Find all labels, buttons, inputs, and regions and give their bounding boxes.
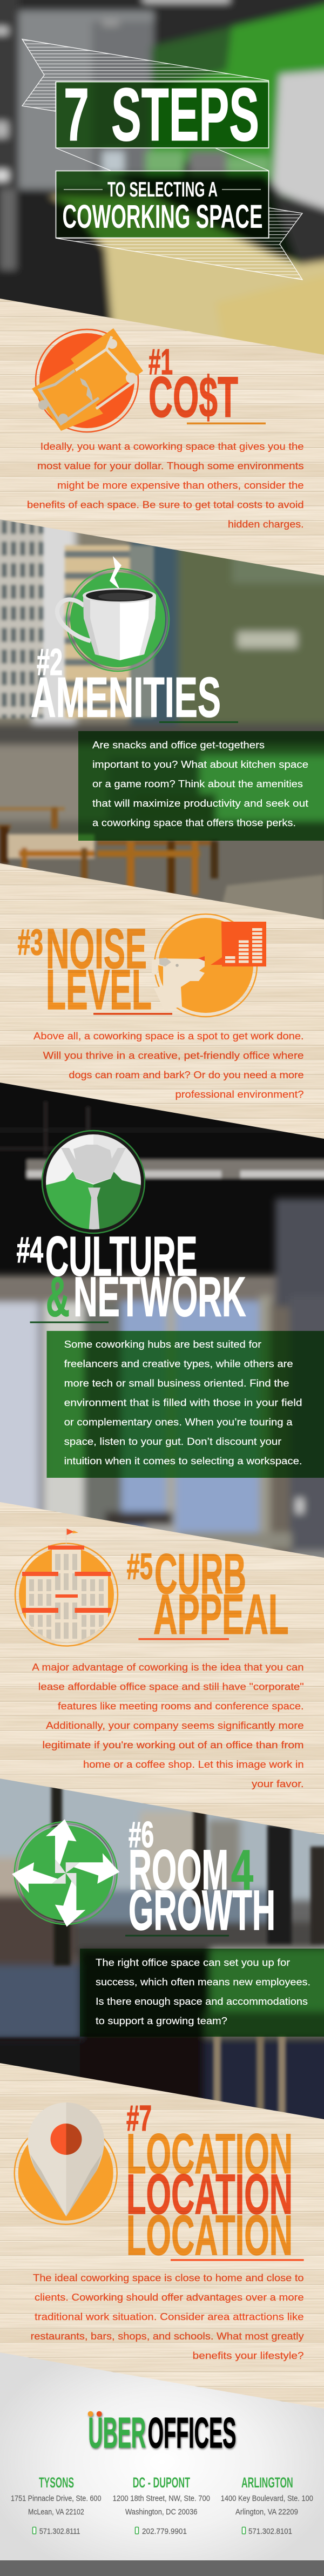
body text: to support a growing team? <box>96 2015 227 2026</box>
body text: space, listen to your gut. Don’t discount your <box>64 1436 281 1447</box>
growth photo background <box>0 1771 324 2130</box>
body text: dogs can roam and bark? Or do you need a more <box>69 1069 304 1080</box>
body text <box>33 1030 304 1100</box>
icon: phone <box>242 2527 245 2534</box>
section 1: cost <box>27 328 304 530</box>
underline <box>159 721 238 723</box>
body text: most value for your dollar. Though some environments <box>37 460 304 471</box>
body text <box>64 1338 302 1466</box>
wood panel: #3 noise level <box>0 863 324 1139</box>
icon: map pin in circle <box>15 2102 117 2225</box>
panel: culture text background <box>46 1331 324 1478</box>
underline <box>30 1322 109 1323</box>
body text: hidden charges. <box>228 518 304 530</box>
body text: benefits of each space. Be sure to get total costs to avoid <box>27 499 304 510</box>
body text <box>92 739 308 828</box>
banner fold: connecting lines <box>56 148 269 171</box>
footer: Tysons location: 571.302.8111 <box>39 2527 80 2536</box>
subtitle rules <box>64 189 261 190</box>
footer: logo: UBER <box>88 2409 146 2457</box>
culture photo background <box>0 1080 324 1567</box>
footer: Tysons location <box>11 2474 102 2536</box>
body text: lease affordable office space and still have "corporate" <box>38 1681 304 1692</box>
section 5: curb appeal <box>15 1529 304 1789</box>
body text <box>32 1661 304 1789</box>
section 4: culture and network <box>17 1131 302 1466</box>
icon: four pinwheel arrows in circle <box>12 1819 119 1927</box>
body text: Will you thrive in a creative, pet-friendly office where <box>43 1050 304 1061</box>
footer: DC Dupont location: 202.779.9901 <box>142 2527 187 2536</box>
icon: office building in circle <box>15 1529 118 1646</box>
underline <box>171 2259 304 2261</box>
heading: #7: #7 <box>126 2098 152 2139</box>
body text: Above all, a coworking space is a spot to get work done. <box>33 1030 304 1042</box>
body text: features like meeting rooms and conference space. <box>58 1700 304 1712</box>
body text: benefits your lifestyle? <box>193 2350 304 2361</box>
body text: your favor. <box>252 1778 304 1789</box>
body text: A major advantage of coworking is the idea that you can <box>32 1661 304 1673</box>
underline <box>187 422 266 424</box>
heading: #3: #3 <box>17 922 43 963</box>
heading: cost: CO$T <box>148 364 238 429</box>
body text: or a game room? Think about the amenities <box>92 778 303 789</box>
footer: Tysons location: TYSONS <box>39 2474 74 2491</box>
footer: DC Dupont location: 1200 18th Street, NW, Ste. 700 <box>113 2494 210 2503</box>
icon: shirt, collar and tie in circle <box>42 1131 145 1233</box>
title box outline top <box>56 82 269 148</box>
body text: important to you? What about kitchen space <box>92 759 308 770</box>
heading: #2: #2 <box>37 641 63 683</box>
underline <box>93 1013 172 1015</box>
title: 7: 7 <box>64 73 89 157</box>
body text: intuition when it comes to selecting a workspace. <box>64 1455 302 1466</box>
heading: noise: NOISE <box>46 917 147 981</box>
heading: #1: #1 <box>148 342 173 382</box>
icon: coffee cup in circle <box>57 556 169 671</box>
footer: DC Dupont location: Washington, DC 20036 <box>125 2508 198 2517</box>
subtitle box outline <box>56 171 269 238</box>
panel: amenities text background <box>78 731 324 841</box>
underline <box>125 1935 229 1936</box>
body text <box>27 441 304 530</box>
icon: barking dog with sound bars <box>152 914 266 1017</box>
logo: dot orange <box>88 2411 93 2417</box>
heading: room: ROOM <box>129 1838 228 1902</box>
footer: Arlington location: 1400 Key Boulevard, Ste. 100 <box>221 2494 313 2503</box>
icon: phone <box>135 2527 138 2534</box>
subtitle: to selecting a: TO SELECTING A <box>107 178 218 201</box>
body text: clients. Coworking should offer advantages over a more <box>35 2291 304 2303</box>
wood panel: #1 cost <box>0 299 324 576</box>
subtitle box <box>56 171 269 238</box>
body text: might be more expensive than others, consider the <box>57 479 304 491</box>
body text: a coworking space that offers those perks. <box>92 817 296 828</box>
header photo background <box>0 0 324 367</box>
body text: Are snacks and office get-togethers <box>92 739 265 751</box>
heading: curb: CURB <box>154 1543 246 1606</box>
logo: dot red <box>97 2411 102 2417</box>
body text: freelancers and creative types, while others are <box>64 1358 293 1369</box>
body text: Some coworking hubs are best suited for <box>64 1338 261 1350</box>
body text: environment that is filled with those in your field <box>64 1397 302 1408</box>
body text <box>31 2272 304 2361</box>
body text: more tech or small business oriented. Find the <box>64 1377 289 1389</box>
heading: level: LEVEL <box>46 958 152 1022</box>
heading: culture: CULTURE <box>45 1226 198 1288</box>
amenities photo background <box>0 508 324 939</box>
heading: #6: #6 <box>129 1814 154 1855</box>
footer: Tysons location: 1751 Pinnacle Drive, Ste. 600 <box>11 2494 102 2503</box>
footer: Arlington location <box>221 2474 313 2536</box>
footer background <box>0 2343 324 2576</box>
body text: The ideal coworking space is close to home and close to <box>33 2272 304 2283</box>
ribbon: upper <box>22 39 269 111</box>
heading: #5: #5 <box>127 1546 153 1587</box>
title box: 7 steps <box>56 82 269 148</box>
panel: growth text background <box>80 1949 324 2037</box>
body text: professional environment? <box>175 1088 303 1100</box>
underline <box>138 1638 229 1640</box>
section 2: amenities <box>31 556 308 828</box>
heading: 4: 4 <box>231 1838 253 1902</box>
body text: Ideally, you want a coworking space that gives you the <box>40 441 304 452</box>
body text: Additionally, your company seems significantly more <box>46 1720 304 1731</box>
body text: restaurants, bars, shops, and schools. What most greatly <box>31 2330 304 2342</box>
heading: #4: #4 <box>17 1229 43 1270</box>
section 3: noise level <box>17 914 304 1100</box>
ribbon: lower <box>56 208 302 280</box>
footer: Tysons location: McLean, VA 22102 <box>28 2508 84 2517</box>
section 6: room 4 growth <box>12 1814 310 2026</box>
icon: torn money in circle <box>32 328 143 432</box>
body text: success, which often means new employees. <box>96 1976 310 1987</box>
body text: that will maximize productivity and seek out <box>92 797 308 809</box>
footer: Arlington location: Arlington, VA 22209 <box>235 2508 298 2517</box>
heading: ampersand: & <box>46 1266 70 1328</box>
wood panel: #7 location <box>0 2063 324 2409</box>
body text <box>96 1957 310 2026</box>
sound bars <box>225 928 262 963</box>
footer: DC Dupont location: DC - DUPONT <box>133 2474 190 2491</box>
section 7: location <box>15 2098 304 2361</box>
body text: Is there enough space and accommodations <box>96 1996 308 2007</box>
body text: The right office space can set you up for <box>96 1957 290 1968</box>
wood panel: #5 curb appeal <box>0 1502 324 1835</box>
body text: legitimate if you're working out of an office than from <box>42 1739 303 1750</box>
footer: DC Dupont location <box>113 2474 210 2536</box>
body text: traditional work situation. Consider area attractions like <box>35 2311 304 2322</box>
icon: phone <box>32 2527 36 2534</box>
title banner <box>22 39 302 280</box>
footer: Arlington location: 571.302.8101 <box>248 2527 292 2536</box>
body text: or complementary ones. When you’re touring a <box>64 1416 293 1428</box>
body text: home or a coffee shop. Let this image work in <box>83 1759 304 1770</box>
